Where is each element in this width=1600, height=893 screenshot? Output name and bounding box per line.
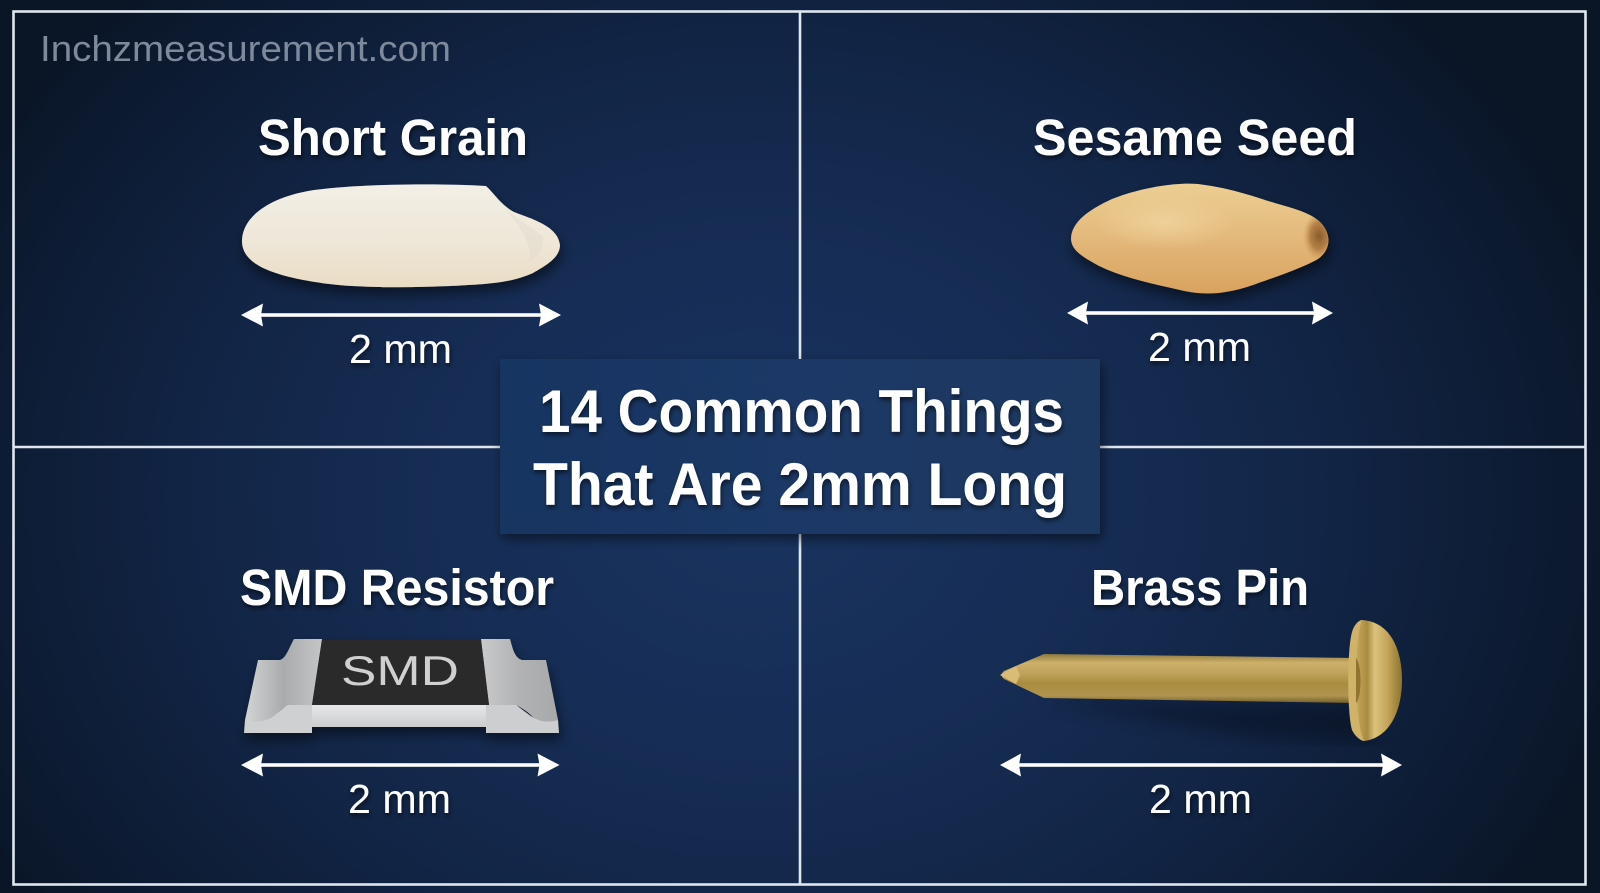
arrow: pin width: [1000, 754, 1402, 776]
top film: [312, 640, 489, 705]
label: 2 mm: 2 mm: [349, 326, 452, 372]
title: [533, 378, 1067, 518]
icon: sesame seed: [1071, 184, 1335, 293]
panel: sesame seed: [1033, 109, 1357, 370]
left terminal: [245, 639, 322, 723]
arrow: rice width: [241, 304, 561, 326]
panel: smd resistor: [240, 559, 560, 822]
heading: smd resistor: SMD Resistor: [240, 559, 554, 616]
front face: [283, 705, 517, 727]
title: 14 Common Things: [539, 378, 1064, 445]
watermark: Inchzmeasurement.com: [40, 28, 451, 69]
heading: sesame seed: Sesame Seed: [1033, 109, 1357, 166]
icon: smd resistor: [244, 639, 559, 733]
shadow: pin: [1040, 700, 1380, 742]
icon: brass pin: [1000, 620, 1402, 741]
label: 2 mm: 2 mm: [348, 776, 451, 822]
title: That Are 2mm Long: [533, 451, 1067, 518]
icon: rice grain: [242, 184, 560, 287]
arrow: seed width: [1067, 302, 1333, 324]
title panel: [500, 359, 1100, 534]
label: SMD marking: SMD: [341, 647, 459, 694]
heading: short grain: Short Grain: [258, 109, 528, 166]
panel: short grain: [241, 109, 561, 372]
label: 2 mm: 2 mm: [1148, 324, 1251, 370]
right terminal: [481, 639, 558, 722]
arrow: resistor width: [241, 754, 560, 776]
heading: brass pin: Brass Pin: [1091, 559, 1309, 616]
panel: brass pin: [1000, 559, 1402, 822]
label: 2 mm: 2 mm: [1149, 776, 1252, 822]
